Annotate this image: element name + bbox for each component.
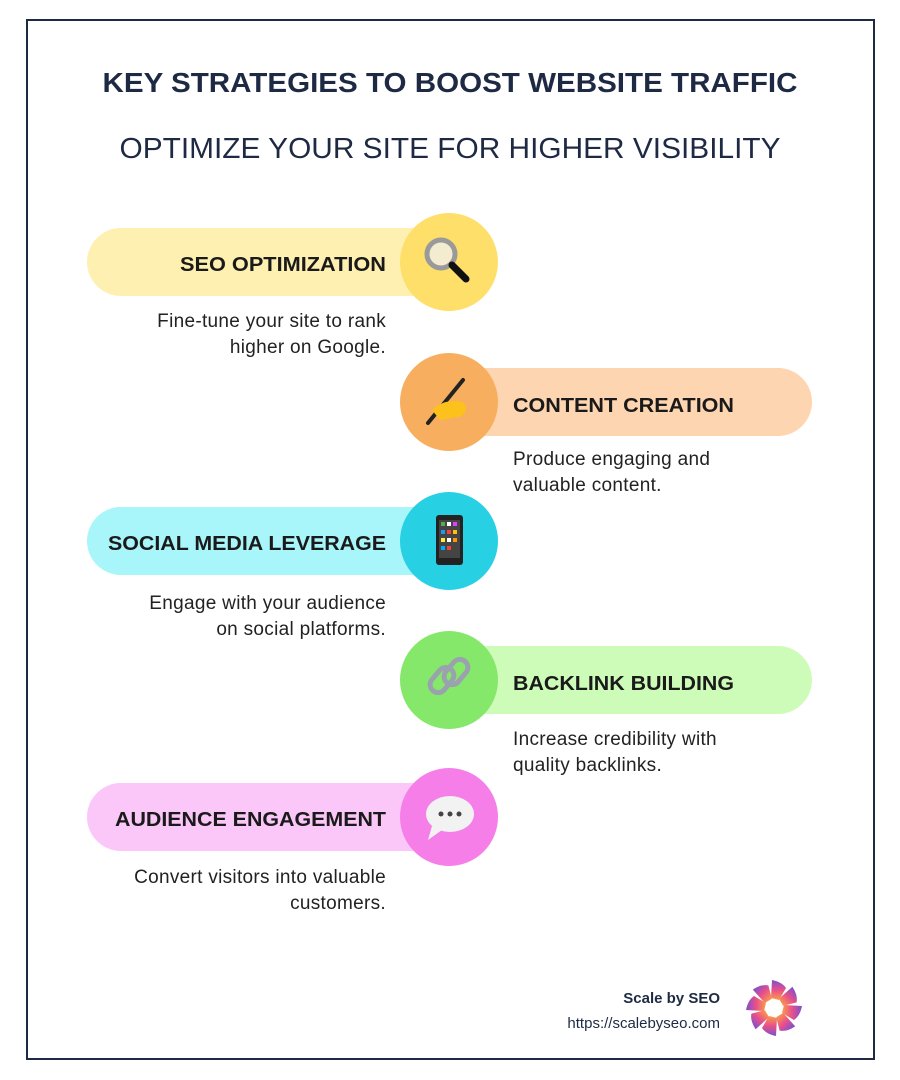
step 4: backlink building: BACKLINK BUILDING	[513, 673, 734, 695]
step 3: social media	[87, 492, 498, 640]
icon: chain link	[427, 656, 471, 696]
footer brand: Scale by SEO	[623, 990, 720, 1007]
step 5: audience engagement	[87, 768, 498, 914]
step 5: audience engagement: AUDIENCE ENGAGEMENT	[115, 809, 386, 831]
step 1: SEO optimization: SEO OPTIMIZATION	[180, 254, 386, 276]
step 3: social media: on social platforms.	[216, 619, 386, 640]
step 2: content creation: Produce engaging and	[513, 449, 710, 470]
logo	[746, 980, 802, 1036]
step 3: social media: Engage with your audience	[149, 593, 386, 614]
step 5: audience engagement: customers.	[290, 893, 386, 914]
step 5: audience engagement: Convert visitors into valuable	[134, 867, 386, 888]
step 4: backlink building	[400, 631, 812, 776]
title: KEY STRATEGIES TO BOOST WEBSITE TRAFFIC	[102, 67, 798, 98]
step 4: backlink building: Increase credibility with	[513, 729, 717, 750]
step 1: SEO optimization: higher on Google.	[230, 337, 386, 358]
step 2: content creation: valuable content.	[513, 475, 662, 496]
icon: phone	[436, 515, 463, 565]
icon: magnifier	[427, 240, 466, 279]
step 2: content creation: CONTENT CREATION	[513, 395, 734, 417]
step 2: content creation	[400, 353, 812, 496]
icon: writing hand	[428, 380, 466, 423]
step 3: social media: SOCIAL MEDIA LEVERAGE	[108, 533, 386, 555]
step 1: SEO optimization	[87, 213, 498, 358]
step 1: SEO optimization: Fine-tune your site to rank	[157, 311, 386, 332]
icon: speech bubble	[426, 796, 474, 840]
step 4: backlink building: quality backlinks.	[513, 755, 662, 776]
footer brand: https://scalebyseo.com	[567, 1015, 720, 1032]
footer brand	[567, 990, 720, 1032]
subtitle: OPTIMIZE YOUR SITE FOR HIGHER VISIBILITY	[120, 133, 780, 165]
